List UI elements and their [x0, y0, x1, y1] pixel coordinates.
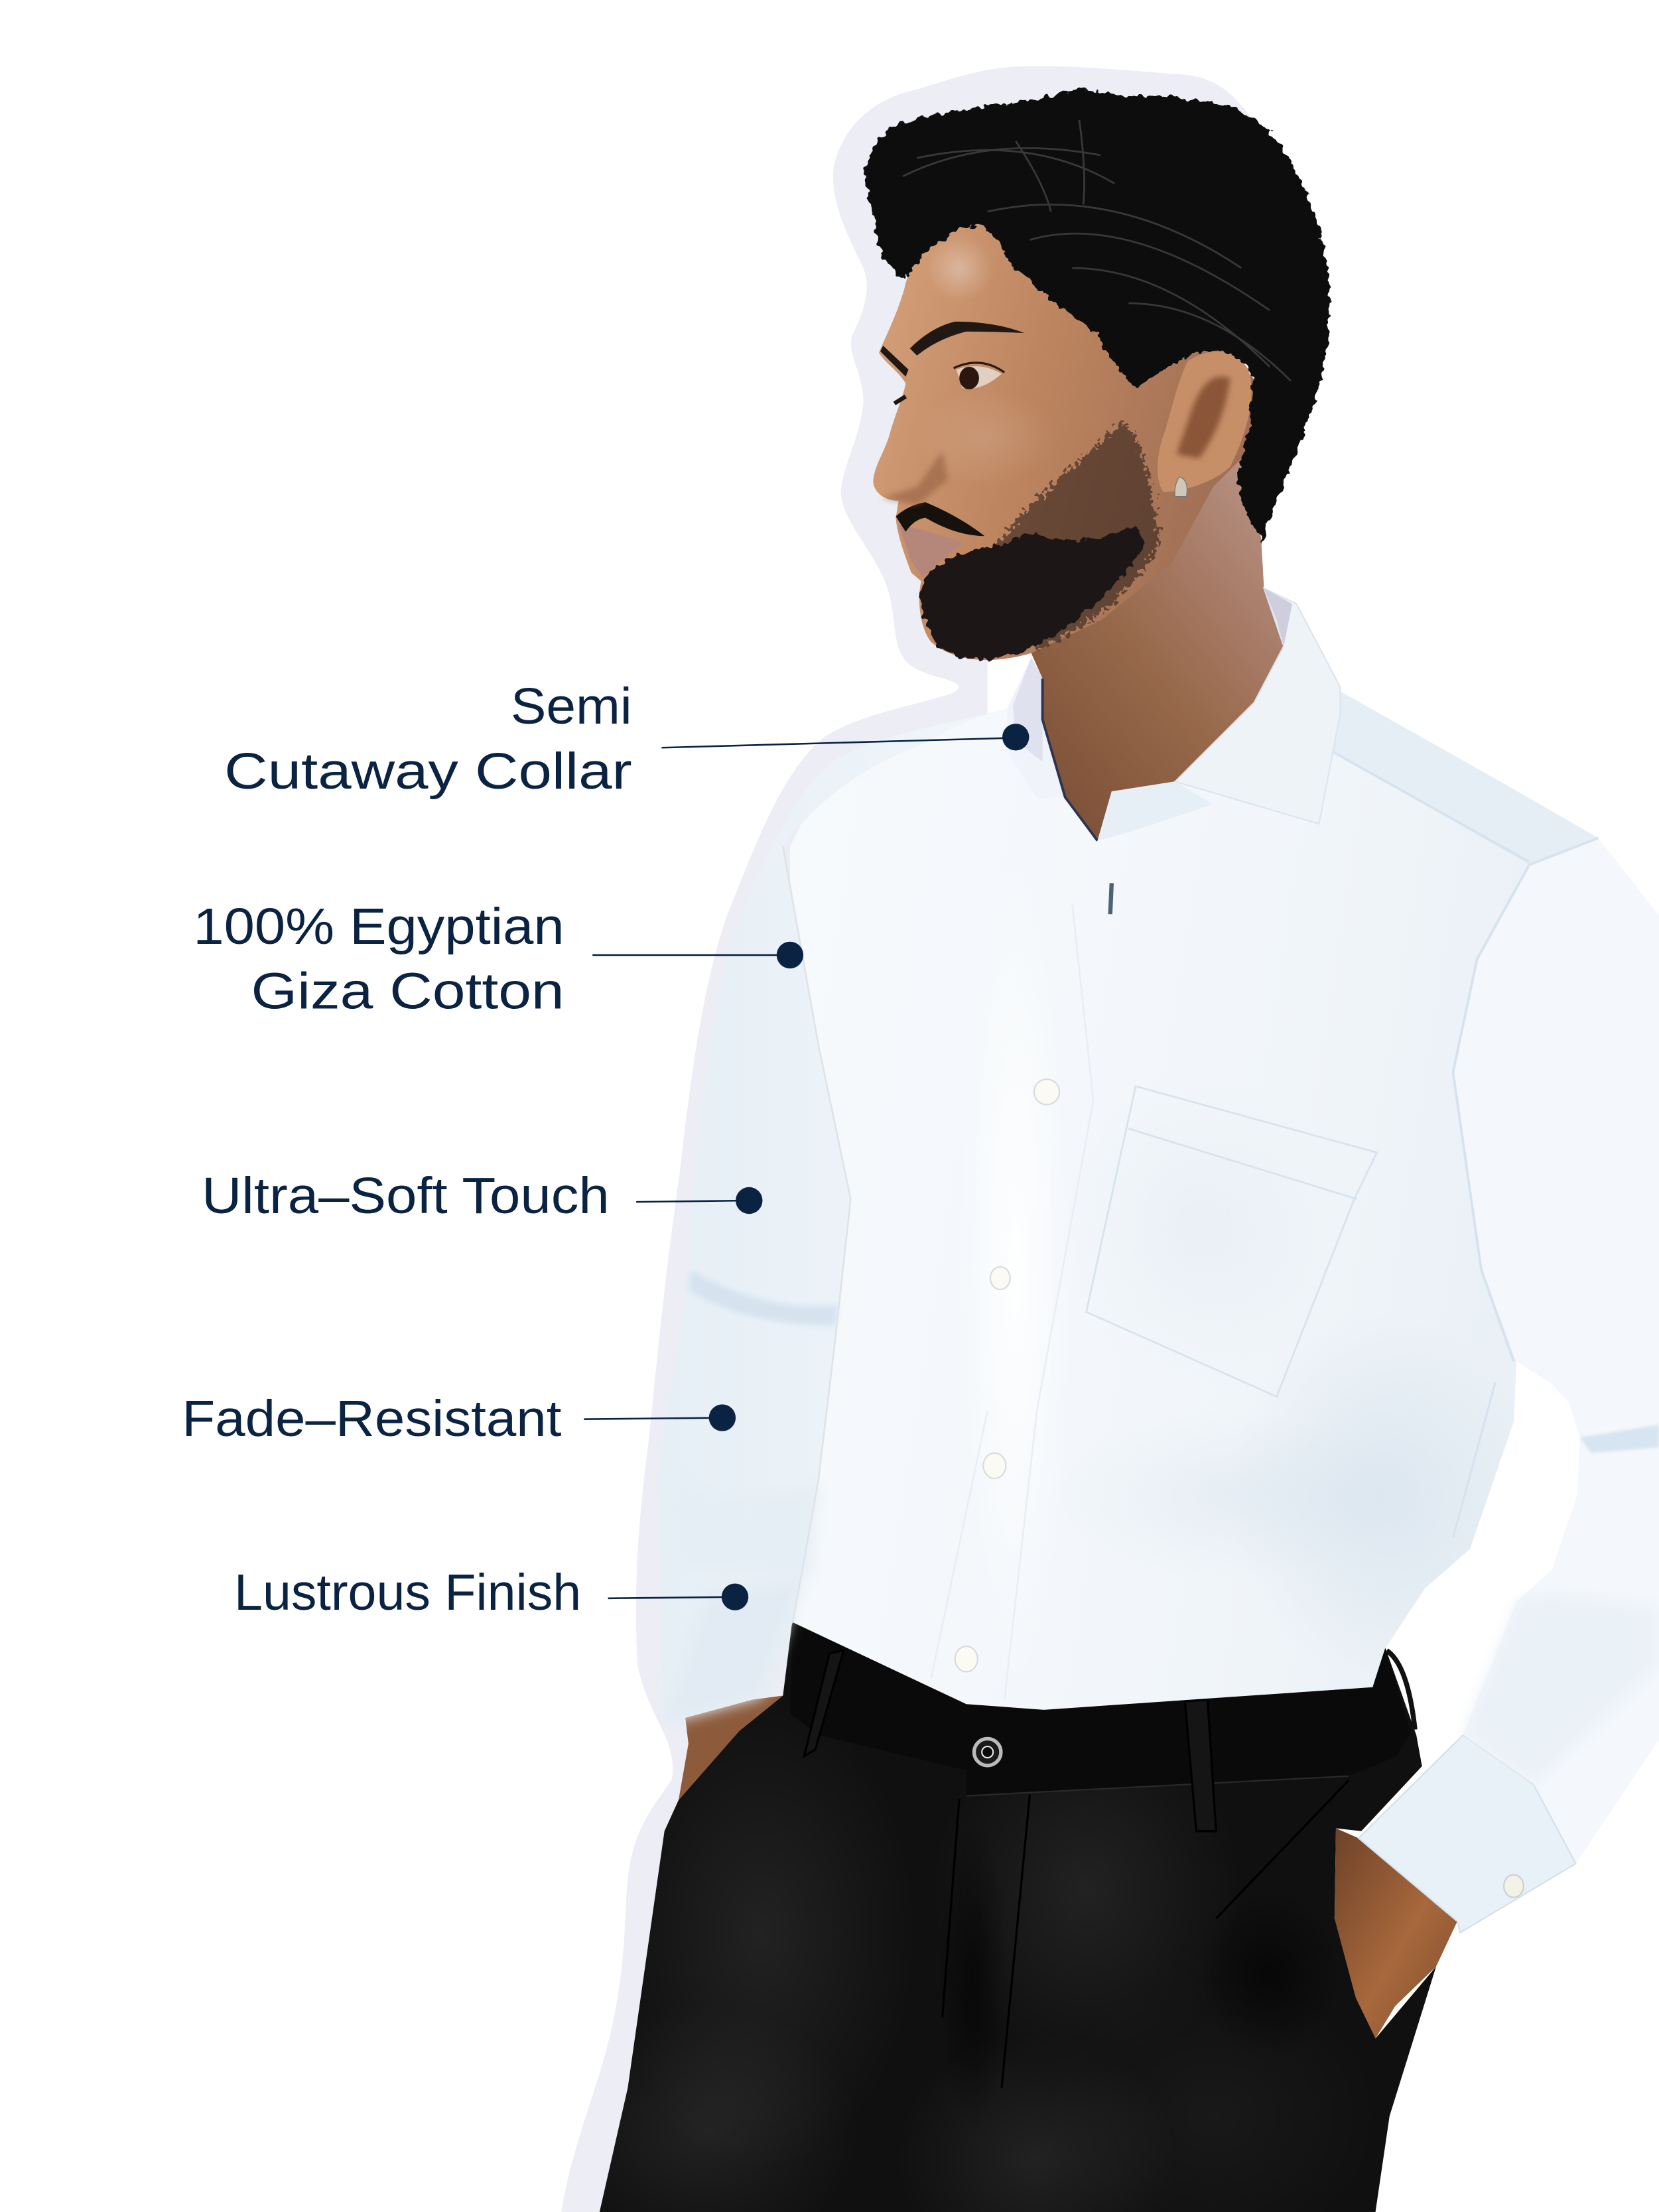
trousers	[550, 1616, 1436, 2212]
shirt right sleeve	[1453, 838, 1659, 1864]
callout: Ultra-Soft Touch	[202, 1168, 762, 1224]
leader line	[592, 954, 790, 956]
eye	[954, 363, 1004, 389]
label: Fade–Resistant	[182, 1391, 561, 1447]
cheek highlight	[917, 388, 1058, 487]
dot	[1002, 724, 1029, 751]
right cuff	[1359, 1735, 1576, 1933]
nose shadow	[882, 452, 948, 505]
label: Cutaway Collar	[224, 744, 632, 800]
neck	[1031, 452, 1284, 841]
label: Lustrous Finish	[234, 1565, 581, 1621]
label: Giza Cotton	[251, 964, 564, 1020]
label	[224, 679, 632, 800]
label: 100% Egyptian	[193, 899, 564, 955]
waist button	[974, 1738, 1001, 1766]
ear	[1158, 352, 1252, 492]
collar	[1007, 588, 1340, 841]
cuff button	[1504, 1875, 1524, 1898]
far eyelash	[894, 397, 905, 403]
shirt torso	[790, 691, 1599, 1710]
callout: Lustrous Finish	[234, 1565, 748, 1621]
shirt left sleeve	[659, 708, 1007, 1724]
silhouette halo behind the model	[561, 66, 1270, 2212]
moustache	[896, 502, 984, 536]
label: Ultra–Soft Touch	[202, 1168, 610, 1224]
right hand in pocket	[1335, 1828, 1457, 2038]
leader line	[608, 1597, 735, 1598]
label: Semi	[511, 679, 632, 735]
fly seam and pocket line	[943, 1780, 1349, 2088]
lips	[899, 525, 964, 577]
trouser sheen	[624, 1793, 1272, 2212]
leader line	[584, 1418, 722, 1419]
shirt shading and folds	[663, 691, 1659, 1785]
forehead highlight	[925, 234, 993, 302]
callout: 100% Egyptian Giza Cotton	[193, 899, 803, 1020]
leader line	[661, 738, 1016, 748]
eyebrow near	[910, 322, 1024, 356]
hair	[864, 89, 1329, 542]
head	[864, 89, 1329, 660]
dot	[777, 942, 803, 968]
earring	[1175, 477, 1187, 497]
leader line	[636, 1201, 749, 1202]
shirt pocket	[1087, 1086, 1377, 1397]
callout: Fade-Resistant	[182, 1391, 736, 1447]
left hand	[679, 1696, 783, 1800]
dot	[736, 1187, 762, 1214]
waistband	[790, 1616, 1411, 1796]
beard stubble	[988, 423, 1160, 649]
face	[873, 212, 1256, 660]
eyebrow far	[880, 346, 909, 377]
callout: Semi Cutaway Collar	[224, 679, 1029, 800]
label	[193, 899, 564, 1020]
dot	[722, 1583, 748, 1610]
top buttonhole	[1110, 883, 1112, 914]
model figure	[550, 89, 1659, 2212]
dot	[709, 1404, 736, 1431]
shirt buttons	[955, 1079, 1059, 1671]
belt loops	[804, 1650, 1216, 1831]
rear strap	[1387, 1650, 1415, 1730]
beard	[921, 525, 1146, 659]
